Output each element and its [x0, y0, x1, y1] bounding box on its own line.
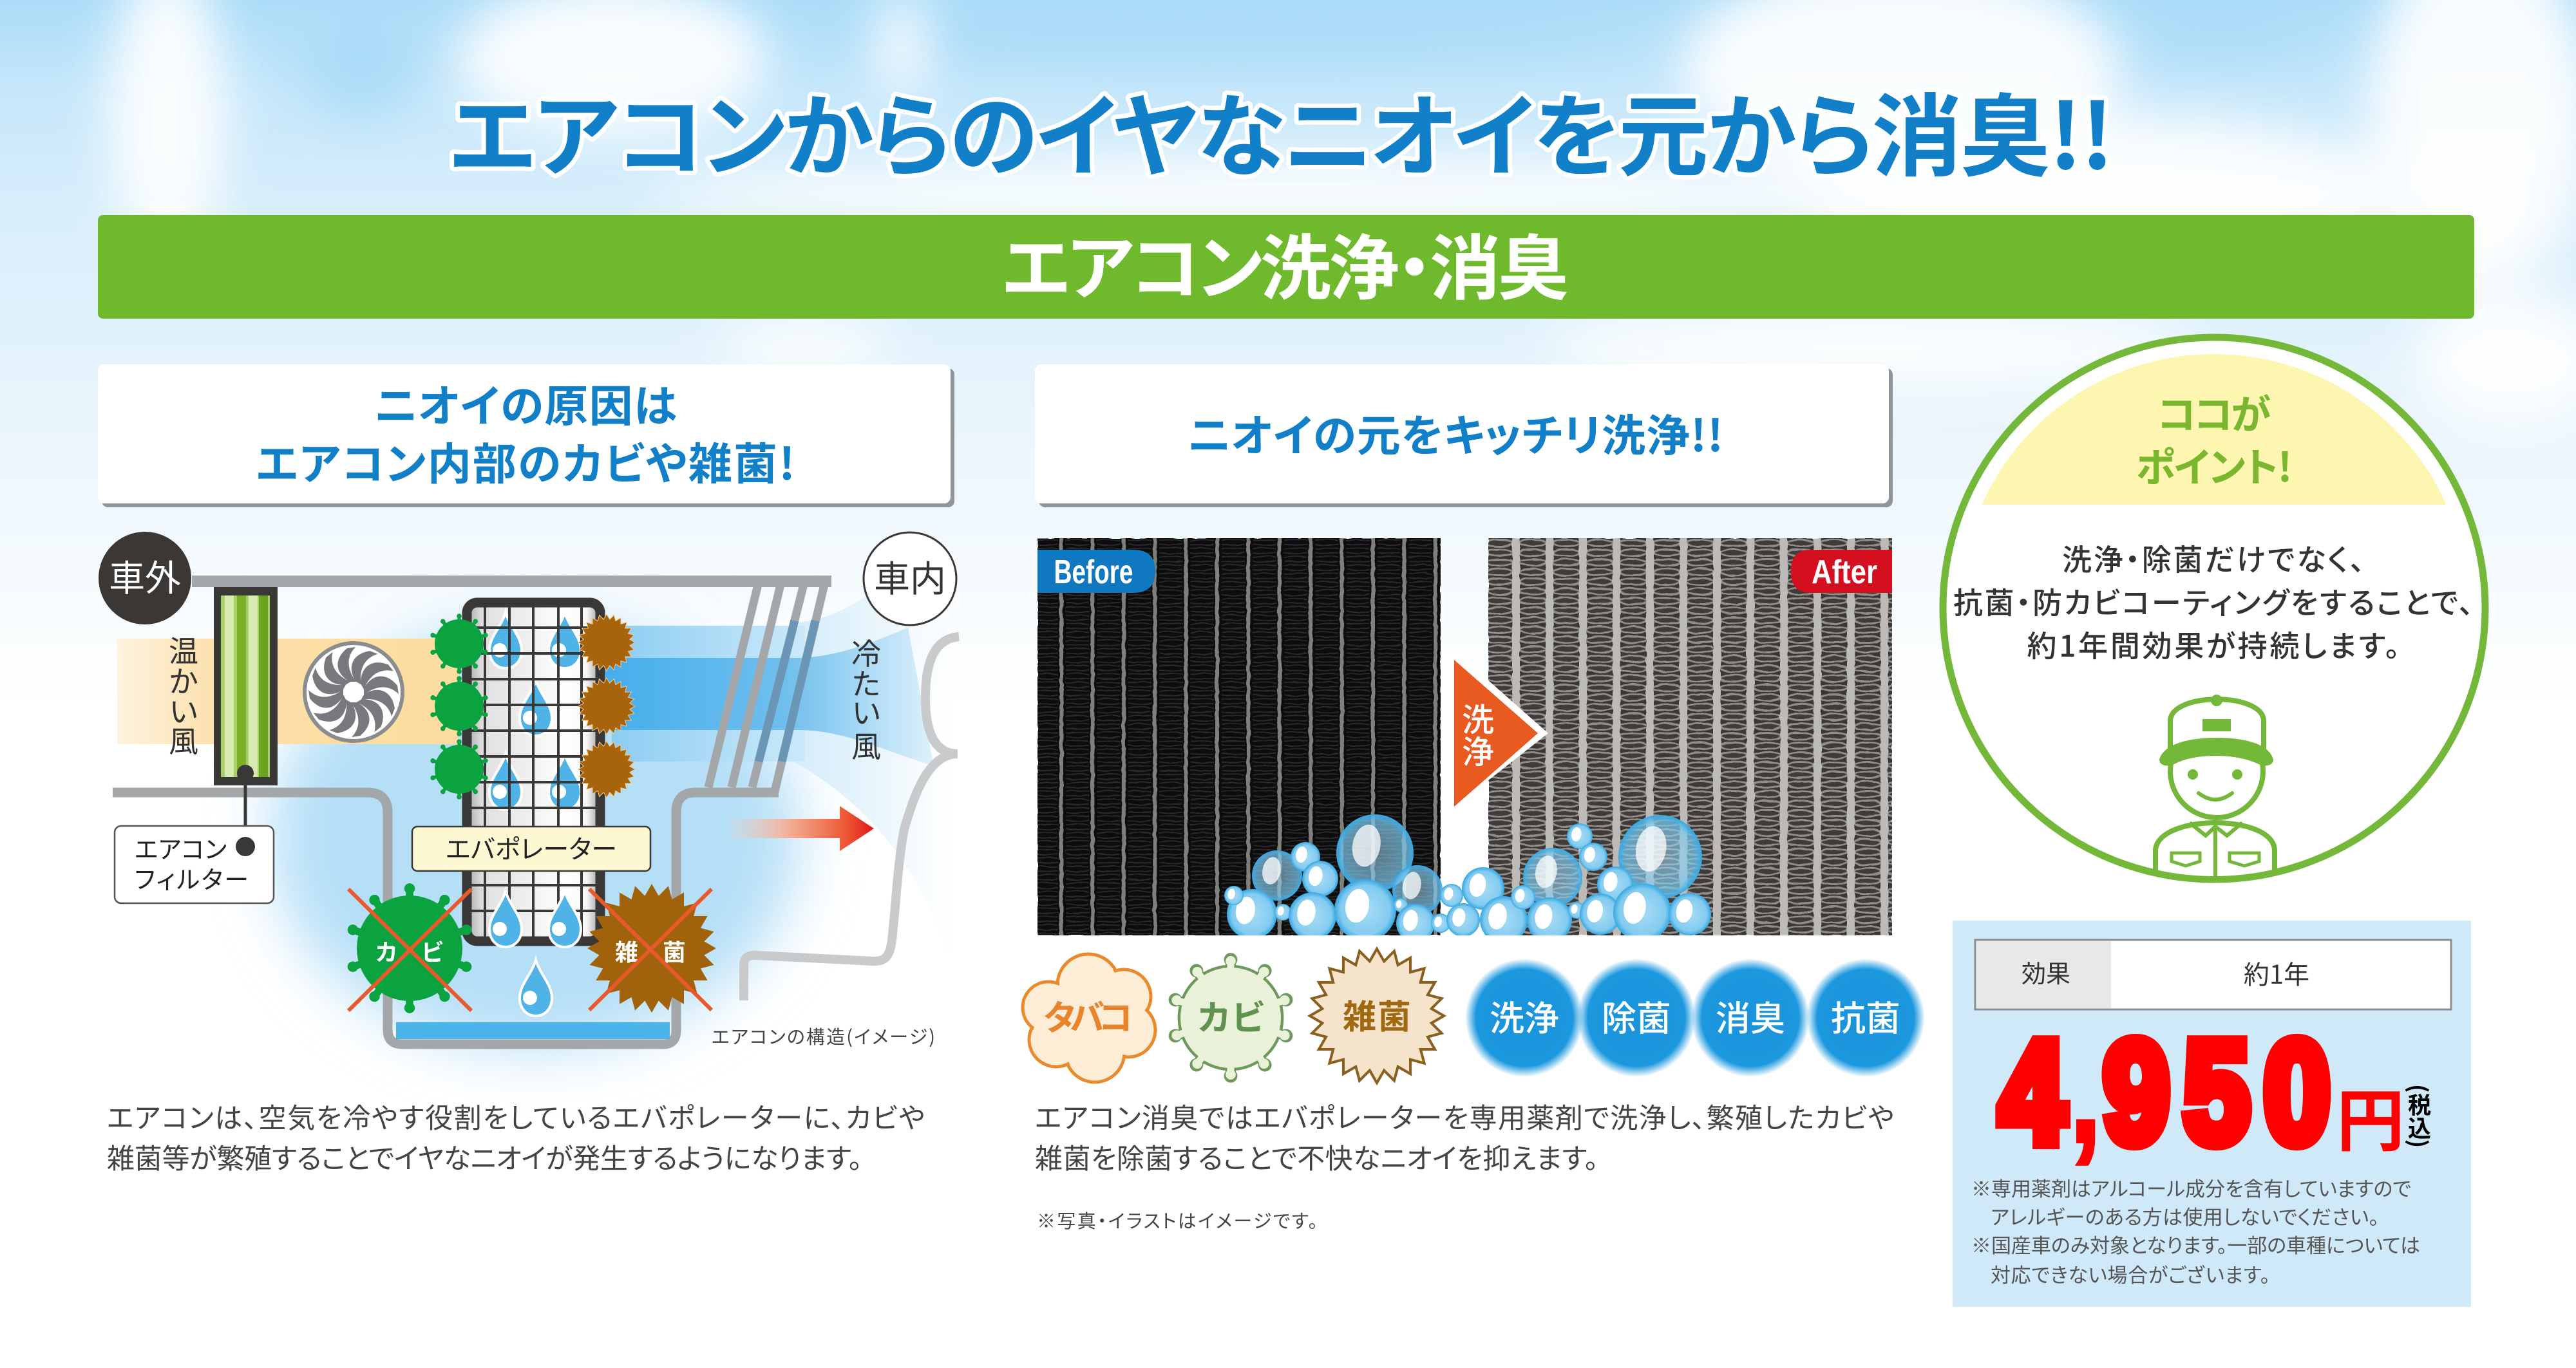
point text: 洗浄・除菌だけでなく、 — [2062, 537, 2365, 579]
cold air label — [851, 631, 881, 766]
label: outside: 車外 — [109, 550, 181, 602]
green banner — [98, 211, 2474, 319]
warm air label: か — [169, 659, 198, 701]
bacteria colonies — [578, 604, 645, 801]
warm air band — [117, 639, 459, 744]
image note: ※写真・イラストはイメージです。 — [1037, 1206, 1318, 1233]
crossed mold: ビ — [422, 934, 443, 968]
badge: mold: カビ — [1198, 989, 1264, 1040]
middle description: エアコン消臭ではエバポレーターを専用薬剤で洗浄し、繁殖したカビや — [1035, 1096, 1894, 1136]
badge: bacteria: 雑菌 — [1343, 990, 1411, 1038]
panel heading: cause of odour: エアコン内部のカビや雑菌! — [256, 429, 795, 492]
crossed mold — [346, 883, 473, 1013]
after tag — [1791, 550, 1892, 593]
point text: 約1年間効果が持続します。 — [2027, 623, 2400, 666]
crossed mold: カ — [375, 934, 397, 968]
before photo — [1037, 538, 1441, 935]
crossed bacteria: 菌 — [663, 934, 686, 968]
badge: tobacco — [1023, 954, 1155, 1082]
upper duct — [192, 576, 831, 587]
after photo — [1488, 538, 1892, 935]
after tag: After — [1812, 554, 1877, 591]
label: air filter — [115, 765, 274, 903]
evaporator — [467, 603, 600, 941]
point text: 抗菌・防カビコーティングをすることで、 — [1953, 580, 2474, 623]
panel heading: thorough cleaning: ニオイの元をキッチリ洗浄!! — [1188, 400, 1723, 464]
cold air core — [605, 628, 934, 766]
effect table — [1975, 940, 2451, 1009]
notes: アレルギーのある方は使用しないでください。 — [1991, 1201, 2379, 1230]
panel heading: thorough cleaning — [1035, 364, 1893, 507]
circle: deodorize — [1691, 959, 1810, 1077]
point heading — [1982, 354, 2447, 505]
green banner: エアコン洗浄・消臭 — [1002, 211, 1569, 314]
vents — [708, 579, 826, 794]
label: air filter: フィルター — [135, 860, 249, 895]
fan — [305, 643, 402, 741]
cold air label: 風 — [851, 724, 881, 766]
label: inside: 車内 — [874, 550, 946, 603]
crossed bacteria: 雑 — [615, 934, 638, 968]
label: air filter: エアコン — [135, 830, 227, 865]
circle: sterilize — [1577, 959, 1696, 1077]
circle: deodorize: 消臭 — [1716, 990, 1785, 1041]
effect table: 約1年 — [2244, 954, 2309, 991]
price: 4 — [2000, 1011, 2065, 1173]
arrow: wash: 浄 — [1462, 727, 1494, 773]
filter — [214, 587, 278, 785]
notes — [1971, 1173, 2420, 1288]
left description: エアコンは、空気を冷やす役割をしているエバポレーターに、カビや — [107, 1096, 925, 1136]
price: 円 — [2336, 1066, 2405, 1165]
circle: antibacterial: 抗菌 — [1831, 990, 1900, 1041]
cold air label: 冷 — [851, 631, 881, 673]
cool air glow — [270, 579, 966, 1049]
label: outside — [99, 532, 191, 624]
price box — [1953, 921, 2471, 1307]
mold colonies — [430, 614, 489, 800]
head outline — [744, 637, 959, 1000]
point heading: ポイント! — [2136, 435, 2293, 493]
effect table: 効果 — [2022, 954, 2070, 989]
circle: antibacterial — [1806, 959, 1925, 1077]
badge: tobacco: タバコ — [1043, 989, 1133, 1040]
vents tinted by cold air — [759, 621, 815, 762]
tax included: (税込) — [2403, 1084, 2436, 1148]
arrow: wash — [1443, 650, 1548, 816]
price: 950 — [2103, 1011, 2330, 1173]
left description: 雑菌等が繁殖することでイヤなニオイが発生するようになります。 — [107, 1137, 862, 1177]
red arrow — [729, 806, 874, 851]
cold air label: い — [852, 690, 880, 733]
title: エアコンからのイヤなニオイを元から消臭!! — [450, 65, 2114, 195]
warm air label: い — [169, 689, 198, 731]
label: evaporator — [412, 827, 650, 871]
notes: ※専用薬剤はアルコール成分を含有していますので — [1971, 1173, 2411, 1202]
circle: clean — [1465, 959, 1584, 1077]
circle: clean: 洗浄 — [1490, 990, 1559, 1041]
notes: ※国産車のみ対象となります。一部の車種については — [1971, 1230, 2420, 1259]
water drops — [489, 891, 581, 1016]
badge: mold — [1169, 955, 1293, 1081]
circle: sterilize: 除菌 — [1602, 990, 1671, 1041]
middle description: 雑菌を除菌することで不快なニオイを抑えます。 — [1035, 1137, 1598, 1177]
foam bubbles — [1224, 814, 1711, 944]
crossed bacteria — [587, 863, 737, 1019]
air conditioner structure diagram — [99, 532, 966, 1049]
label: evaporator: エバポレーター — [446, 829, 617, 866]
point text — [1953, 537, 2474, 666]
middle description — [1035, 1096, 1894, 1177]
cold air label: た — [852, 661, 880, 704]
warm air label: 温 — [169, 628, 198, 671]
panel heading: cause of odour: ニオイの原因は — [374, 371, 677, 435]
left description — [107, 1096, 925, 1177]
lower duct — [113, 792, 779, 1044]
cold air band — [612, 626, 805, 762]
price: , — [2069, 1011, 2102, 1173]
point heading: ココが — [2157, 382, 2271, 440]
warm air label: 風 — [169, 718, 198, 761]
price — [2000, 1011, 2405, 1173]
worker icon — [2155, 695, 2275, 881]
badge: bacteria — [1311, 928, 1464, 1089]
diagram caption: エアコンの構造(イメージ) — [712, 1022, 935, 1049]
panel heading: cause of odour — [98, 364, 954, 507]
before tag: Before — [1054, 554, 1133, 591]
notes: 対応できない場合がございます。 — [1991, 1259, 2270, 1288]
arrow: wash: 洗 — [1462, 695, 1494, 741]
warm air label — [169, 628, 198, 761]
point circle — [1943, 337, 2485, 881]
label: inside — [864, 532, 956, 625]
drain water — [396, 1022, 670, 1039]
